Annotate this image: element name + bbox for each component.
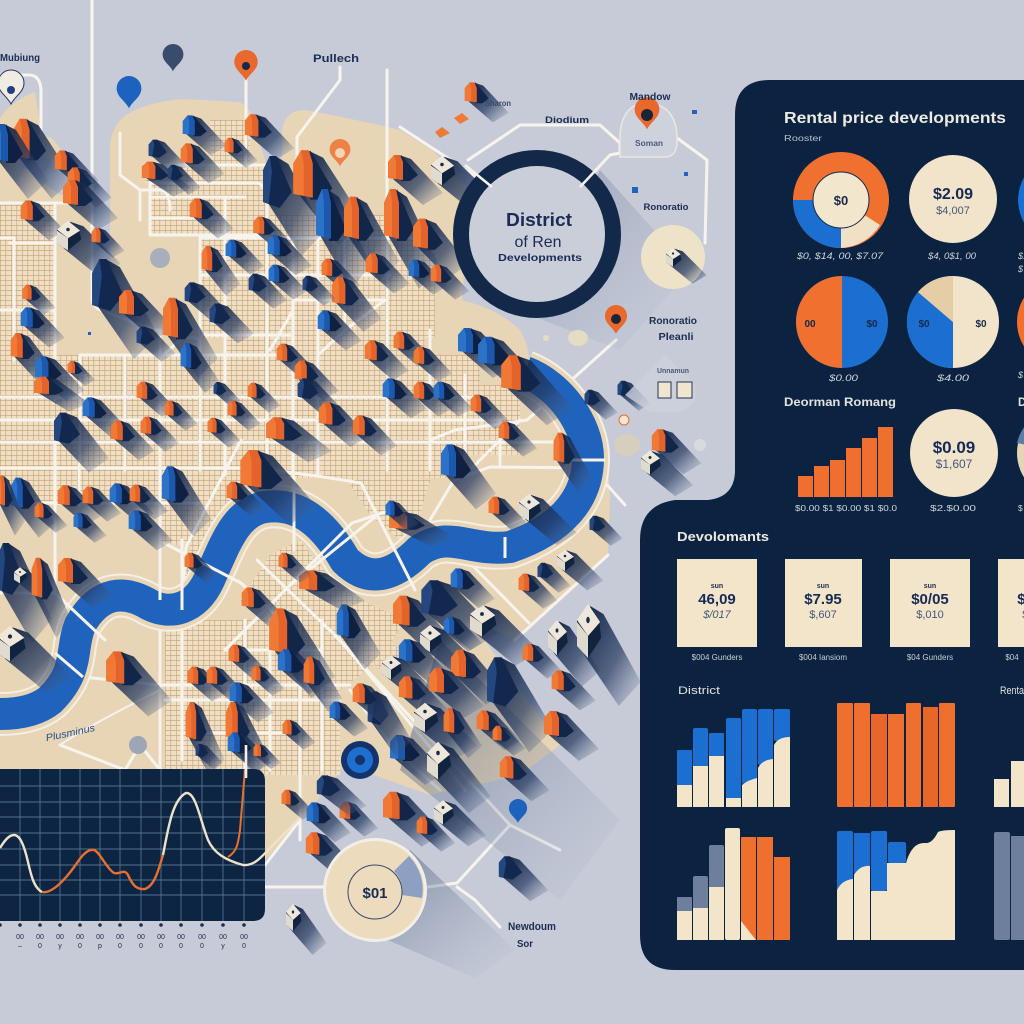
circle value 2 xyxy=(910,409,998,497)
map labels: Ronoratio xyxy=(649,316,697,327)
pin: blue small xyxy=(509,799,527,823)
cream blobs xyxy=(543,330,706,456)
map labels: Plusminus xyxy=(45,723,96,744)
pin: blue xyxy=(117,76,141,108)
bar labels: $2.$0.00 xyxy=(930,503,976,513)
stacked bars: blue and cream xyxy=(677,709,790,807)
map labels: Ronoratio xyxy=(644,202,689,212)
card 1: $/017 xyxy=(702,609,732,621)
card 3: $04 Gunders xyxy=(907,653,953,662)
chart axis ticks and labels: – xyxy=(18,943,22,950)
pie: cream, blue and tan: $0 xyxy=(975,319,987,330)
card 3: $,010 xyxy=(916,609,944,621)
chart axis ticks and labels: 0 xyxy=(242,943,246,950)
card 3: sun xyxy=(924,583,936,590)
subheading: Rooster xyxy=(784,133,822,143)
pie: cream, blue and tan xyxy=(907,276,999,368)
plain park marks xyxy=(60,248,170,754)
pie labels row 1: $4, 0$1, 00 xyxy=(927,251,976,261)
card 4 partial: $04 xyxy=(1005,653,1019,662)
partial pie blue xyxy=(1018,155,1024,245)
chart axis ticks and labels: 0 xyxy=(78,943,82,950)
circle value 2: $0.09 xyxy=(933,438,975,457)
bridges over the river xyxy=(55,460,605,677)
pin: white xyxy=(0,70,24,104)
pie labels row 2: $4.00 xyxy=(936,373,969,383)
card 3 xyxy=(890,559,970,662)
heading: Developments: Devolomants xyxy=(677,529,769,544)
dashboard panel xyxy=(640,80,1024,970)
river xyxy=(0,372,588,714)
pin: white dot xyxy=(7,86,15,94)
ring title: of Ren xyxy=(514,234,562,251)
bar chart: orange flat xyxy=(837,703,955,807)
map labels: Sor xyxy=(517,939,533,950)
pie: cream, blue and tan: $0 xyxy=(918,319,930,330)
map labels: Soman xyxy=(635,139,663,148)
pie labels row 2: $ xyxy=(1017,370,1024,380)
price dial circle: $01 xyxy=(362,885,388,902)
heading: Downtown Romang: Deorman Romang xyxy=(784,397,896,409)
chart axis ticks and labels: 00 xyxy=(36,934,44,941)
orange squares xyxy=(435,113,469,138)
map labels: Pleanli xyxy=(658,332,694,343)
pie labels row 1: $0, $14, 00, $7.07 xyxy=(796,251,884,261)
map labels: Newdoum xyxy=(508,921,556,933)
lower right grey shadow band xyxy=(400,640,620,900)
stacked area: blue and cream xyxy=(837,830,955,940)
pie labels row 1 xyxy=(796,251,1024,274)
bar chart: orange rising xyxy=(798,427,893,497)
map labels: Diodium xyxy=(545,115,589,125)
map labels: Unnamun xyxy=(657,368,689,375)
chart axis ticks and labels: 00 xyxy=(219,934,227,941)
pin: ring marker xyxy=(330,139,350,166)
card 1: 46,09 xyxy=(698,591,736,608)
chart axis ticks and labels: 00 xyxy=(137,934,145,941)
pin: ring marker centre xyxy=(335,148,345,158)
circle value 1 xyxy=(909,155,997,243)
panel background xyxy=(640,80,1024,970)
cream circle with building xyxy=(641,225,707,289)
blue dots xyxy=(88,110,697,335)
partial pie mixed xyxy=(1017,407,1024,499)
pin: orange top centre xyxy=(242,62,250,70)
pin centre xyxy=(641,109,653,121)
chart axis ticks and labels: 00 xyxy=(76,934,84,941)
heading: District: District xyxy=(678,685,720,697)
price dial circle xyxy=(323,838,515,978)
bar chart: cream partial xyxy=(994,761,1024,807)
map pins xyxy=(0,44,527,823)
card 1: sun xyxy=(711,583,723,590)
pie: orange and blue xyxy=(796,276,888,368)
stacked bars: grey, cream and orange xyxy=(677,828,790,940)
circle value 2: $1,607 xyxy=(936,457,973,471)
bubble: two squares xyxy=(625,355,696,412)
pie labels row 2 xyxy=(828,370,1024,383)
chart axis ticks and labels: 0 xyxy=(38,943,42,950)
white road network xyxy=(0,0,707,927)
chart axis ticks and labels xyxy=(0,923,248,950)
donut chart: $0 xyxy=(834,193,848,208)
buildings: lower map xyxy=(0,450,641,955)
card 3: $0/05 xyxy=(911,591,949,608)
bar chart: grey partial xyxy=(994,832,1024,940)
card 2: $7.95 xyxy=(804,591,842,608)
bubble: orange pin xyxy=(620,103,677,157)
chart axis ticks and labels: 00 xyxy=(157,934,165,941)
card 1: $004 Gunders xyxy=(692,653,742,662)
pin: orange lower xyxy=(605,305,627,334)
chart axis ticks and labels: 0 xyxy=(118,943,122,950)
chart grid xyxy=(0,769,265,921)
chart axis ticks and labels: 00 xyxy=(116,934,124,941)
chart axis ticks and labels: p xyxy=(98,943,102,950)
trend line: orange part xyxy=(42,850,163,892)
chart axis ticks and labels: 0 xyxy=(200,943,204,950)
map labels: Mandow xyxy=(630,92,671,103)
chart axis ticks and labels: 00 xyxy=(198,934,206,941)
trend line: rising cream part xyxy=(163,793,300,865)
pie: orange and blue: $0 xyxy=(866,319,878,330)
chart axis ticks and labels: 0 xyxy=(179,943,183,950)
card 2: sun xyxy=(817,583,829,590)
map labels: Mubiung xyxy=(0,53,40,64)
chart axis ticks and labels: 00 xyxy=(96,934,104,941)
partial pie orange xyxy=(1017,276,1024,368)
chart axis ticks and labels: 00 xyxy=(240,934,248,941)
chart axis ticks and labels: 00 xyxy=(56,934,64,941)
chart axis ticks and labels: 0 xyxy=(159,943,163,950)
buildings: upper map xyxy=(0,82,707,509)
pie labels row 1: $ xyxy=(1017,264,1024,274)
map labels: Pullech xyxy=(313,53,359,65)
chart axis ticks and labels: 0 xyxy=(139,943,143,950)
pin: grey xyxy=(163,44,183,71)
chart axis ticks and labels: y xyxy=(58,943,62,950)
pin: orange top xyxy=(234,50,258,81)
road passing the chart xyxy=(245,745,247,778)
map: district land and street network xyxy=(0,0,707,927)
card 2: $004 Iansiom xyxy=(799,653,847,662)
callouts on the right of the map xyxy=(0,53,707,950)
bar labels: $0.00 $1 $0.00 $1 $0.0 xyxy=(795,503,897,513)
heading: Rental price developments: Rental price developments xyxy=(784,110,1006,127)
chart background xyxy=(0,769,265,921)
price cards xyxy=(677,559,1024,662)
ring title: District xyxy=(506,210,572,230)
trend line: orange spike xyxy=(228,770,245,857)
land mass xyxy=(0,0,610,860)
ring shadow xyxy=(530,170,690,350)
card 2: $,607 xyxy=(809,609,837,621)
trend line: cream part xyxy=(0,835,42,892)
street grid blocks xyxy=(0,120,520,775)
line chart panel xyxy=(0,745,300,950)
donut chart xyxy=(793,152,889,248)
ring title: Developments xyxy=(498,253,583,264)
card 1 xyxy=(677,559,757,662)
callout lines into ring xyxy=(465,155,610,187)
card 4 partial xyxy=(998,559,1024,662)
circle value 1: $2.09 xyxy=(933,186,973,203)
map labels: Sharon xyxy=(485,99,511,108)
focus circle: District of Rental Developments xyxy=(461,155,690,350)
card 2 xyxy=(785,559,862,662)
chart axis ticks and labels: y xyxy=(221,943,225,950)
ring title xyxy=(498,210,583,264)
chart axis ticks and labels: 00 xyxy=(16,934,24,941)
upper left cream shading xyxy=(20,150,85,195)
pie: orange and blue: 00 xyxy=(804,319,816,330)
circle value 1: $4,007 xyxy=(936,205,970,217)
bar labels xyxy=(795,503,1023,513)
ring xyxy=(461,158,613,310)
icon: blue target marker xyxy=(341,741,379,779)
chart axis ticks and labels: 00 xyxy=(177,934,185,941)
pie labels row 2: $0.00 xyxy=(828,373,858,383)
map labels xyxy=(0,53,697,950)
bar labels: $ xyxy=(1018,503,1023,513)
pin: orange callout xyxy=(635,97,659,129)
